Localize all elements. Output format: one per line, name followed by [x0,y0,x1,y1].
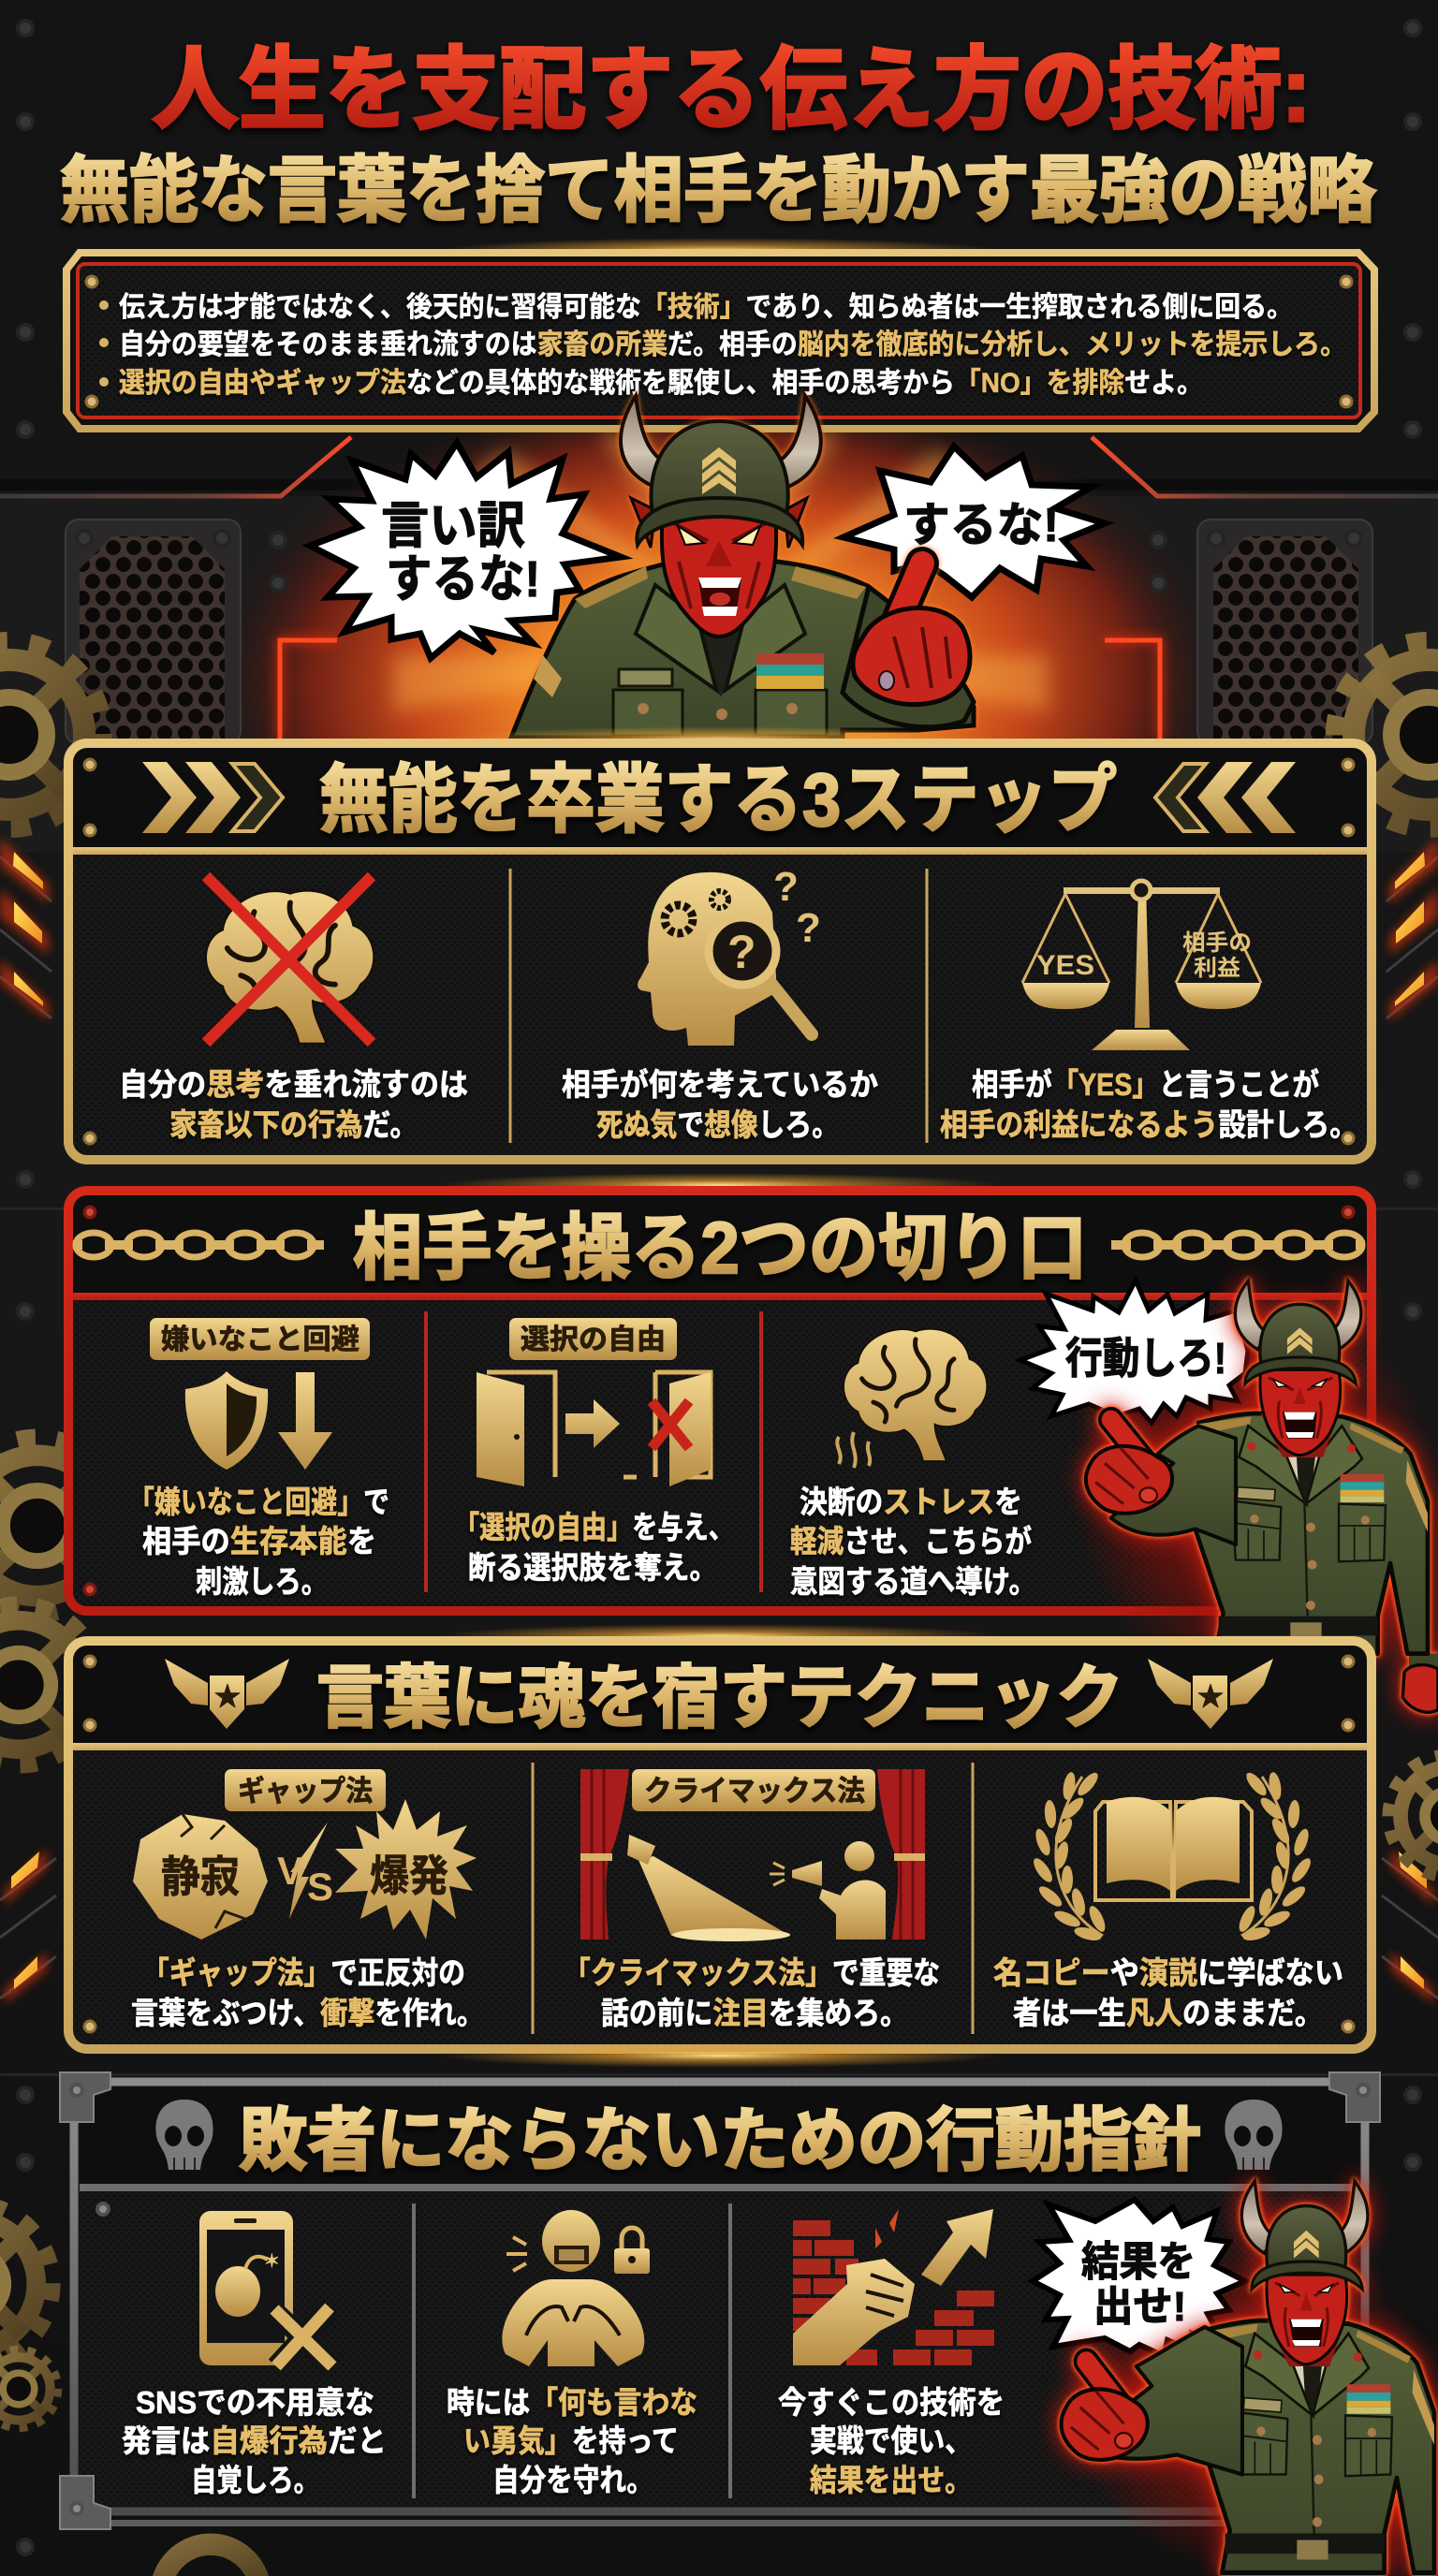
text: results: 実戦で使い、 [810,2423,972,2458]
hero body [511,562,974,738]
icon: VS lightning: S [307,1865,333,1909]
header band [73,1646,1367,1747]
hero mouth [698,578,741,616]
hero medals [756,653,824,689]
red glow behind bottom demon [1072,2237,1437,2574]
icon: shield and down arrow [185,1371,332,1470]
hero epaulets [575,566,866,608]
speech burst: 結果を出せ: 結果を [1081,2239,1196,2285]
torso [1202,2320,1434,2572]
text: avoidance: 「嫌いなこと回避」で [128,1485,389,1519]
icon: cracked rock [133,1814,268,1939]
hero nose [706,541,732,566]
text: choice [454,1510,734,1585]
text: reduce stress: 意図する道へ導け。 [790,1564,1036,1599]
dividers [510,869,927,1143]
text: step 3: 相手の利益になるよう設計しろ。 [940,1107,1357,1142]
text: step 1: 自分の思考を垂れ流すのは [119,1067,468,1102]
badge: 嫌いなこと回避: 嫌いなこと回避 [161,1325,360,1355]
hero fist [853,607,970,705]
header band [80,2087,1359,2185]
text: climax method: 話の前に注目を集めろ。 [601,1996,908,2030]
rivets [82,1206,1356,1597]
torso [1196,1413,1428,1654]
hero finger [894,564,922,629]
text: step 3 [940,1067,1357,1142]
rivets [82,1655,1356,2033]
rivets [82,758,1356,1146]
lamp glow [0,838,1438,2003]
icon: stage with spotlight and speaker [580,1769,925,1941]
speech burst: 言い訳するな: するな! [386,551,540,607]
red glow behind side demon [1072,1292,1437,1685]
hero helmet dome [651,421,788,515]
lamp bars [11,852,1427,1989]
icon: crossed-out brain [206,876,374,1044]
right wing badge: ★ [1197,1682,1224,1711]
text: reduce stress: 決断のストレスを [800,1485,1022,1519]
text: climax method: 「クライマックス法」で重要な [564,1955,940,1990]
hero backdrop: burst, neon lines and vents [0,432,1438,744]
text: courage: 時には「何も言わな [447,2385,697,2420]
dividers [426,1311,761,1592]
badge: 嫌いなこと回避 [150,1318,370,1360]
text: reduce stress: 軽減させ、こちらが [790,1524,1032,1559]
heading: 無能を卒業する3ステップ [319,758,1117,842]
panel frame [68,1641,1372,2049]
panel: two angles [68,1173,1372,1611]
hero left horn [621,396,676,491]
text: step 2: 死ぬ気で想像しろ。 [596,1107,839,1142]
head [1235,1281,1361,1457]
icon: head with magnifier [638,864,821,1046]
icon: balance scale: 相手の [1182,930,1252,956]
speech burst: するな: するな! [903,499,1059,551]
speech burst: 言い訳するな: 言い訳 [381,498,525,554]
icon: explosion: 爆発 [370,1852,448,1900]
hero thumb nail [879,671,894,690]
text: results: 結果を出せ。 [810,2463,972,2497]
hand [1086,1420,1172,1514]
hero sleeve stripes [534,655,562,697]
icon: cracked rock: 静寂 [161,1852,240,1901]
hero pockets [613,690,827,736]
corner brackets [60,2072,1380,2529]
frame bolts [69,2083,1371,2516]
heading: 言葉に魂を宿すテクニック [316,1659,1123,1736]
text: avoidance [128,1485,389,1599]
hero face [662,510,776,637]
right skull [1225,2100,1283,2170]
right wing badge [1148,1659,1273,1729]
hero sleeve [843,587,974,727]
dividers [414,2203,730,2498]
side demon pointing: panel two [1086,1281,1438,1712]
icon: balance scale: YES [1036,950,1094,981]
text: step 2 [562,1067,878,1142]
left wing badge [165,1659,289,1729]
text: results: 今すぐこの技術を [778,2385,1005,2420]
text: gap method [131,1955,484,2030]
header band [73,1195,1367,1296]
text: avoidance: 相手の生存本能を [142,1524,376,1559]
icon: open book with laurel [1030,1770,1314,1943]
lower frame rail [79,2520,1361,2526]
hero: shouting demon sergeant [511,396,974,738]
icon: head with magnifier: ? [773,864,799,910]
left chain [73,1233,324,1257]
text: climax method [564,1955,940,2030]
hero lapels [636,585,805,690]
hero collar and tie [688,608,754,697]
heading: 敗者にならないための行動指針 [239,2101,1201,2179]
left chevrons [142,762,283,833]
text: SNS: 自覚しろ。 [191,2463,319,2497]
text: choice: 「選択の自由」を与え、 [454,1510,734,1544]
hero knuckle lines [894,627,950,688]
title [60,40,1376,231]
text: choice: 断る選択肢を奪え。 [468,1550,717,1585]
text: courage: い勇気」を持って [463,2423,679,2458]
pointing arm [1111,1426,1236,1544]
text: results [778,2385,1005,2497]
hero eyes [678,526,760,545]
panel frame [68,743,1372,1160]
panel: 3 steps [68,726,1372,1160]
icon: VS lightning [277,1822,333,1919]
speech burst: 言い訳するな [310,443,621,658]
right chain [1111,1233,1365,1257]
icon: fist breaking brick wall [793,2209,994,2365]
summary panel: 自分の要望をそのまま垂れ流すのは家畜の所業だ。相手の脳内を徹底的に分析し、メリットを提示しろ。 [119,329,1346,360]
text: courage [447,2385,697,2497]
hand [1062,2362,1148,2460]
head [1241,2181,1368,2366]
dividers [533,1763,973,2034]
hero chevrons [702,447,736,494]
text: gap method: 言葉をぶつけ、衝撃を作れ。 [131,1996,484,2030]
icon: head with magnifier: ? [727,926,756,978]
text: reduce stress [790,1485,1036,1599]
icon: VS lightning: V [277,1849,303,1893]
speech burst: 結果を出せ: 出せ! [1093,2284,1186,2330]
summary panel [66,238,1374,429]
icon: explosion [335,1799,477,1939]
text: quotes: 名コピーや演説に学ばない [993,1955,1343,1990]
icon: phone with bomb: ✶ [264,2251,280,2272]
hero ears [631,498,807,548]
badge: 選択の自由 [509,1318,677,1360]
badge: 選択の自由: 選択の自由 [521,1325,666,1355]
icon: stressed brain [837,1329,987,1468]
badge: クライマックス法: クライマックス法 [644,1775,865,1808]
text: step 1: 家畜以下の行為だ。 [169,1107,418,1142]
speech burst: するな [844,446,1105,597]
header band [73,748,1367,851]
text: gap method: 「ギャップ法」で正反対の [142,1955,465,1990]
badge: ギャップ法: ギャップ法 [238,1775,373,1808]
text: step 3: 相手が「YES」と言うことが [972,1067,1319,1102]
hero name tag [619,669,672,686]
hero buttons [638,703,798,720]
arm down and fist at right edge [1409,1654,1438,1678]
hero right horn [766,396,821,491]
fist at right edge [1402,1665,1438,1712]
heading: 相手を操る2つの切り口 [353,1207,1087,1289]
icon: head with magnifier: ? [796,905,821,951]
left skull [155,2100,213,2170]
decorative brass gears [0,645,1438,2576]
text: step 2: 相手が何を考えているか [562,1067,878,1102]
icon: phone with bomb [199,2211,332,2366]
warning lights [0,838,1438,2003]
pointing arm [1080,2327,1242,2475]
left wing badge: ★ [214,1682,241,1711]
steel frame [74,2082,1365,2511]
hero brows and wrinkles [672,522,768,608]
speech burst: 結果を出せ [1033,2200,1245,2356]
title: 無能な言葉を捨て相手を動かす最強の戦略 [60,149,1376,231]
text: SNS [122,2385,387,2497]
text: quotes: 者は一生凡人のままだ。 [1013,1996,1323,2030]
text: SNS: 発言は自爆行為だと [122,2423,387,2458]
icon: silent person with lock [502,2210,650,2366]
title: 人生を支配する伝え方の技術: [152,40,1311,140]
summary panel: 選択の自由やギャップ法などの具体的な戦術を駆使し、相手の思考から「NO」を排除せよ。 [119,368,1203,399]
side demon pointing: bottom panel [1062,2181,1434,2572]
hero helmet brim [637,498,802,545]
speech burst: 行動しろ: 行動しろ! [1065,1334,1226,1383]
panel frame [68,1191,1372,1611]
panel: action rules [60,2043,1380,2529]
text: step 1 [119,1067,468,1142]
icon: doors and arrow [477,1372,711,1486]
summary panel: 伝え方は才能ではなく、後天的に習得可能な「技術」であり、知らぬ者は一生搾取される側に回る。 [119,292,1293,323]
icon: balance scale [1022,881,1261,1050]
text: courage: 自分を守れ。 [492,2463,653,2497]
text: quotes [993,1955,1343,2030]
icon: balance scale: 利益 [1194,956,1240,981]
text: SNS: SNSでの不用意な [136,2385,374,2420]
text: avoidance: 刺激しろ。 [196,1564,328,1599]
right chevrons [1155,762,1296,833]
speech burst: 行動しろ [1020,1281,1248,1423]
panel: techniques [68,1624,1372,2049]
